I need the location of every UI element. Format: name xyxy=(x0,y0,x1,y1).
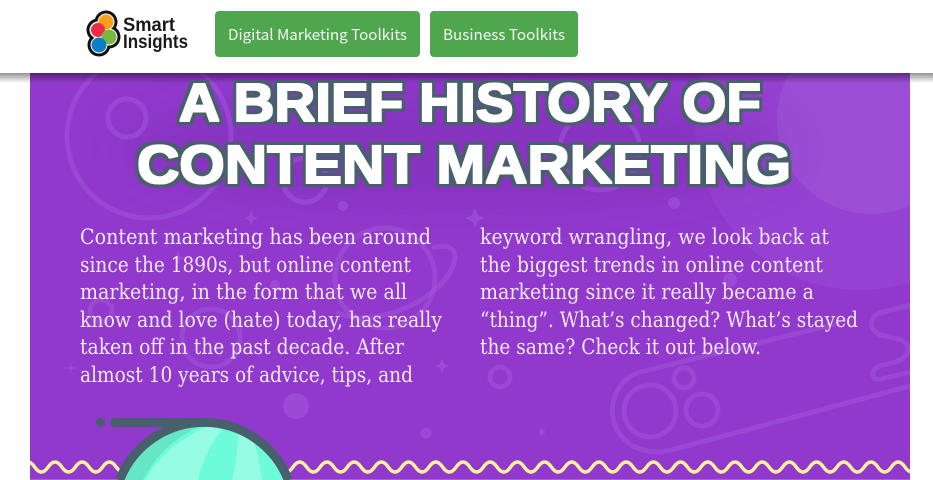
button: Digital Marketing Toolkits xyxy=(215,11,420,57)
panel: purple hero background xyxy=(30,73,910,480)
button: Digital Marketing Toolkits: Digital Marketing Toolkits xyxy=(228,24,407,45)
text block: intro right column: the same? Check it out below. xyxy=(480,335,761,359)
decorative wave border xyxy=(21,462,932,472)
button: Business Toolkits: Business Toolkits xyxy=(443,24,565,45)
text block: intro left column: know and love (hate) today, has really xyxy=(80,308,442,332)
text block: intro right column: keyword wrangling, we look back at xyxy=(480,225,830,249)
illustration: teal globe with handle xyxy=(96,418,288,480)
button: Business Toolkits xyxy=(430,11,578,57)
logo: Smart Insights: Insights xyxy=(123,32,188,53)
text block: intro right column xyxy=(480,225,858,359)
text block: intro left column: since the 1890s, but online content xyxy=(80,253,411,277)
text block: intro left column xyxy=(80,225,442,387)
text block: intro right column: the biggest trends in online content xyxy=(480,253,823,277)
title: CONTENT MARKETING xyxy=(137,135,791,195)
header bar xyxy=(0,0,933,83)
logo: Smart Insights: Smart xyxy=(123,15,176,36)
title xyxy=(137,73,791,195)
text block: intro right column: “thing”. What’s changed? What’s stayed xyxy=(480,308,858,332)
title: A BRIEF HISTORY OF xyxy=(179,73,761,133)
text block: intro left column: taken off in the past decade. After xyxy=(80,335,405,359)
logo: Smart Insights xyxy=(86,10,188,56)
text block: intro left column: almost 10 years of advice, tips, and xyxy=(80,363,413,387)
text block: intro left column: marketing, in the form that we all xyxy=(80,280,407,304)
text block: intro left column: Content marketing has been around xyxy=(80,225,431,249)
text block: intro right column: marketing since it really became a xyxy=(480,280,814,304)
